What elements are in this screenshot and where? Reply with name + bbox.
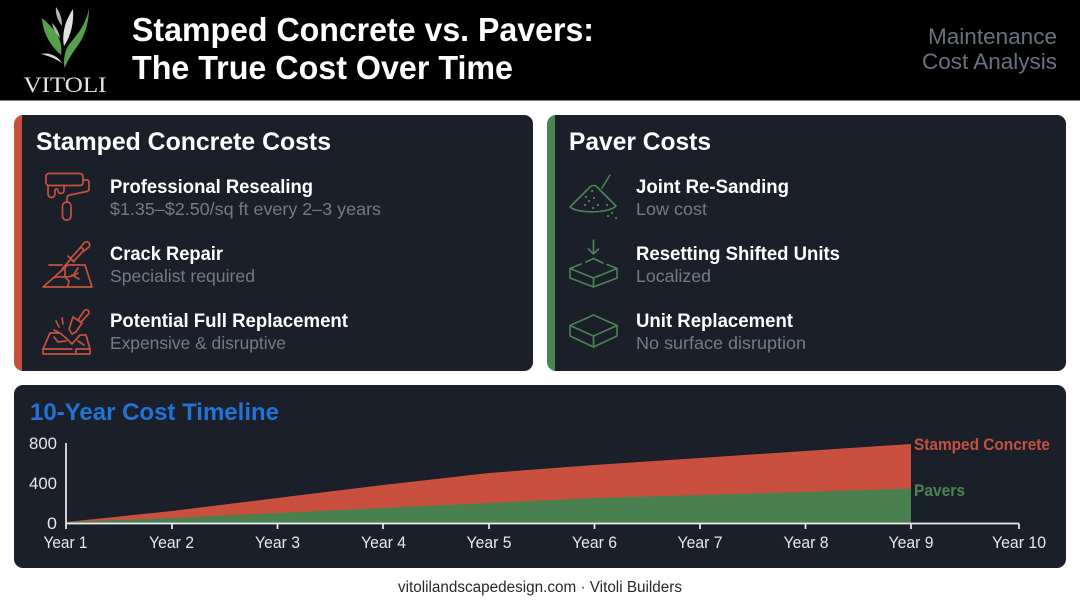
item: unit replacement: Unit Replacement [636,310,793,332]
item: potential full replacement: Expensive & disruptive [110,333,286,353]
item: professional resealing: $1.35–$2.50/sq ft every 2–3 years [110,199,381,219]
area chart [29,435,1050,552]
x axis labels: Year 2 [149,534,194,552]
panel: cost timeline [14,385,1066,568]
x axis labels: Year 3 [255,534,300,552]
icon: paint roller [46,174,89,220]
item: joint re-sanding: Low cost [636,199,707,219]
x axis labels: Year 9 [888,534,934,552]
subtitle: Cost Analysis [922,49,1057,74]
x axis labels: Year 10 [992,534,1046,552]
item: professional resealing: Professional Resealing [110,176,313,198]
series label: stamped concrete: Stamped Concrete [914,436,1050,454]
x axis labels: Year 5 [466,534,512,552]
item: professional resealing [46,174,381,220]
item: resetting shifted units: Localized [636,266,711,286]
item: joint re-sanding: Joint Re-Sanding [636,176,789,198]
series label: pavers: Pavers [914,482,965,500]
item: crack repair: Specialist required [110,266,255,286]
icon: broken slab and trowel [43,310,90,354]
heading: Paver Costs [569,128,711,156]
subtitle: Maintenance [928,24,1057,49]
title [132,11,594,86]
area: pavers [66,488,911,523]
x axis labels [44,534,1046,552]
x axis labels: Year 1 [44,534,88,552]
item: joint re-sanding [570,175,789,219]
logo: Vitoli: VITOLI [24,72,106,97]
item: resetting shifted units: Resetting Shifted Units [636,243,840,265]
area: stamped concrete [66,444,911,523]
panel: paver costs [547,115,1066,371]
title: Stamped Concrete vs. Pavers: [132,11,594,48]
heading: 10-Year Cost Timeline [30,399,279,426]
logo: Vitoli [24,7,106,97]
item: unit replacement [570,310,806,353]
icon: crack repair [43,242,92,287]
heading: Stamped Concrete Costs [36,128,331,156]
panel: stamped concrete costs [14,115,533,371]
x axis labels: Year 8 [784,534,828,552]
item: crack repair [43,242,255,287]
x axis labels: Year 7 [678,534,722,552]
title: The True Cost Over Time [132,49,513,86]
icon: paver with down arrow [570,240,617,287]
item: potential full replacement [43,310,348,354]
icon: paver block [570,315,617,347]
icon: sand pile [570,175,616,218]
footer: vitolilandscapedesign.com · Vitoli Builders [398,579,682,596]
axes [66,443,1019,529]
item: resetting shifted units [570,240,840,287]
x axis labels: Year 6 [572,534,617,552]
item: crack repair: Crack Repair [110,243,223,265]
x axis labels: Year 4 [361,534,406,552]
item: potential full replacement: Potential Full Replacement [110,310,348,332]
header bar [0,0,1080,100]
y axis labels: 400 [29,475,57,493]
y axis labels [29,435,57,533]
y axis labels: 0 [47,515,57,533]
subtitle [922,24,1057,74]
y axis labels: 800 [29,435,57,453]
item: unit replacement: No surface disruption [636,333,806,353]
